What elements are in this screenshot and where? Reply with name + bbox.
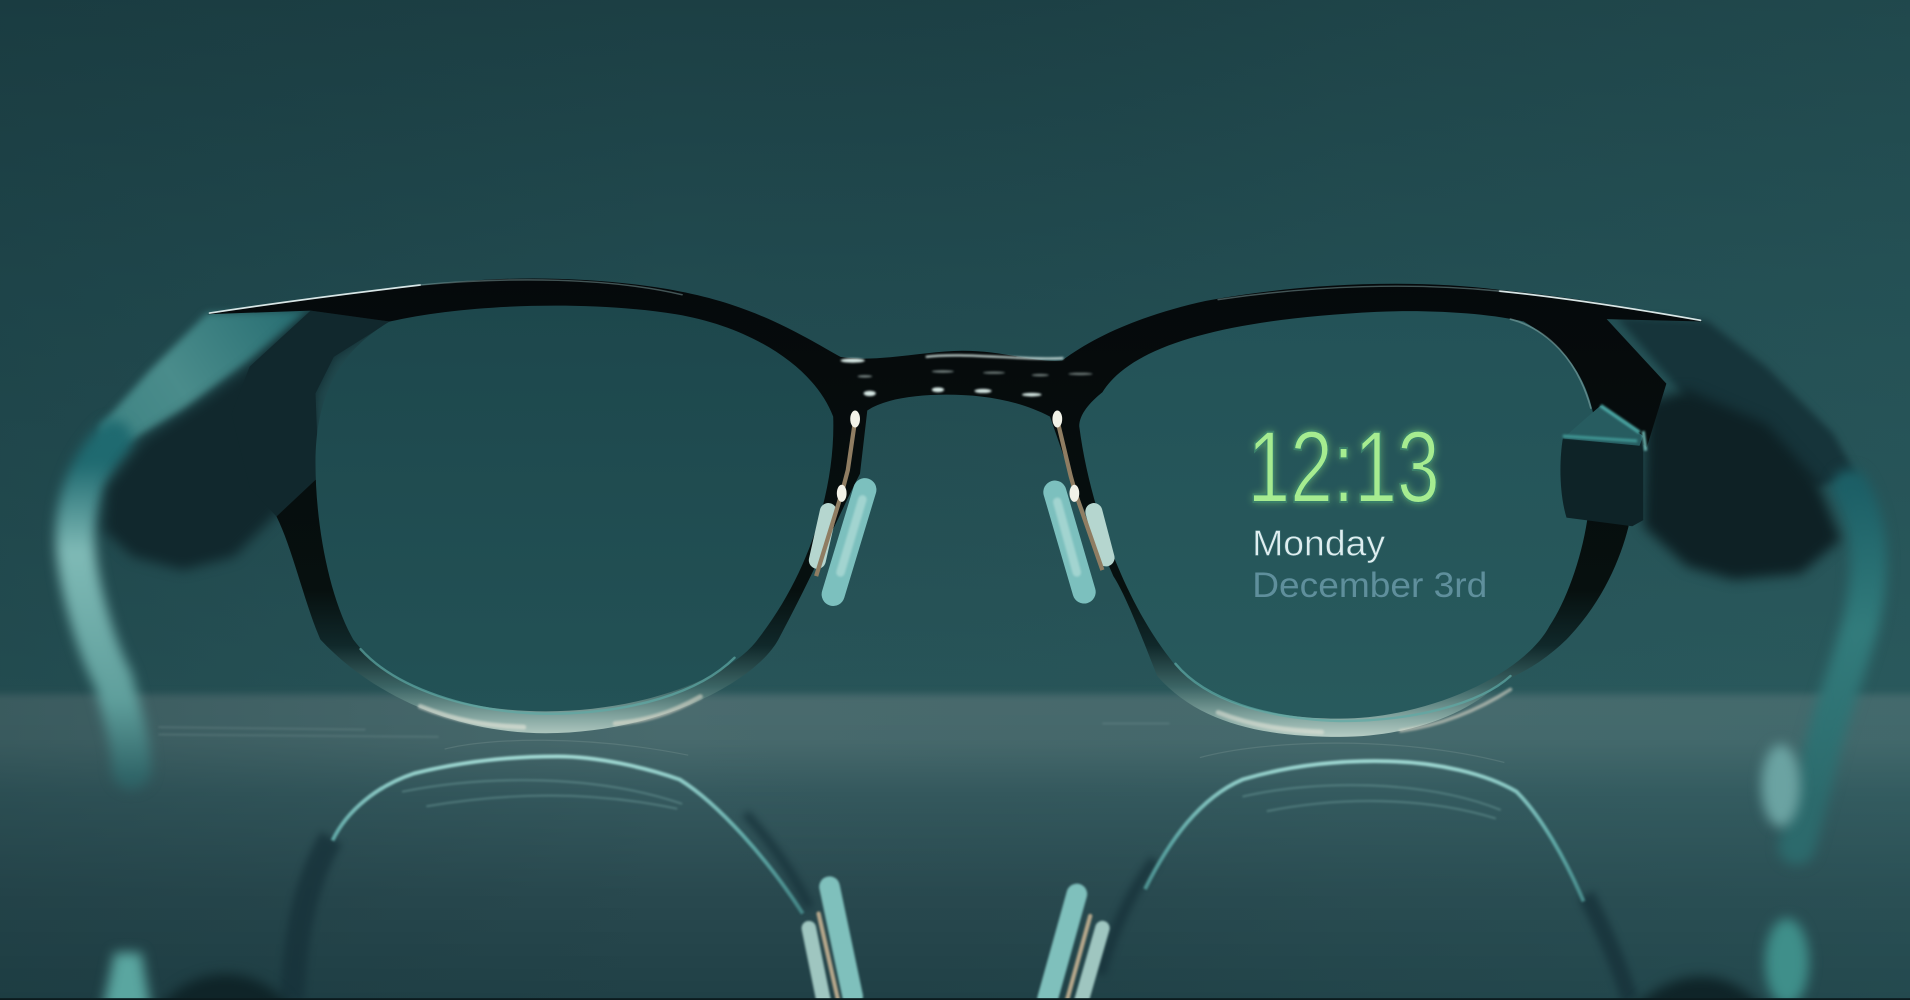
reflected dark rim bands bbox=[292, 814, 1630, 1000]
reflected left rim bbox=[333, 756, 803, 914]
rim highlights bbox=[210, 280, 1700, 732]
background wall bbox=[0, 0, 1910, 706]
time glow: 12:13 bbox=[1247, 409, 1440, 524]
bottom edge line bbox=[0, 998, 1910, 1000]
nose bridge with highlights bbox=[840, 355, 1093, 396]
lower arm bbox=[1797, 487, 1868, 847]
right hinge wedge bbox=[1643, 390, 1841, 580]
right temple arm bbox=[1616, 317, 1868, 847]
right nose pad bbox=[1052, 410, 1106, 592]
glasses frame front bbox=[207, 278, 1703, 737]
left lens bbox=[315, 306, 833, 711]
lower arm bbox=[75, 440, 132, 770]
reflected right rim bbox=[1145, 761, 1584, 901]
left nose pad bbox=[816, 410, 865, 594]
right projector pod bbox=[1560, 406, 1646, 526]
upper dark wedge bbox=[1616, 317, 1858, 487]
right lens bbox=[1079, 311, 1595, 719]
upper wedge bbox=[100, 311, 311, 447]
table surface bbox=[0, 694, 1910, 1000]
arm highlight bbox=[1761, 744, 1800, 827]
time: 12:13 bbox=[1247, 409, 1440, 524]
reflected inner arcs bbox=[402, 780, 1501, 819]
table streaks bbox=[158, 724, 1169, 737]
frame silhouette bbox=[207, 278, 1703, 737]
day: Monday bbox=[1252, 522, 1386, 563]
reflected nose pads bbox=[809, 887, 1102, 1000]
left temple arm bbox=[75, 311, 311, 770]
reflection of glasses in table bbox=[102, 740, 1809, 1000]
reflected temples and hinges bbox=[102, 918, 1809, 1000]
reflected ghost line bbox=[445, 740, 1504, 762]
display: time and date bbox=[1247, 409, 1487, 605]
left hinge wedge bbox=[104, 311, 390, 570]
date: December 3rd bbox=[1252, 566, 1487, 605]
pod top face bbox=[1563, 406, 1643, 446]
